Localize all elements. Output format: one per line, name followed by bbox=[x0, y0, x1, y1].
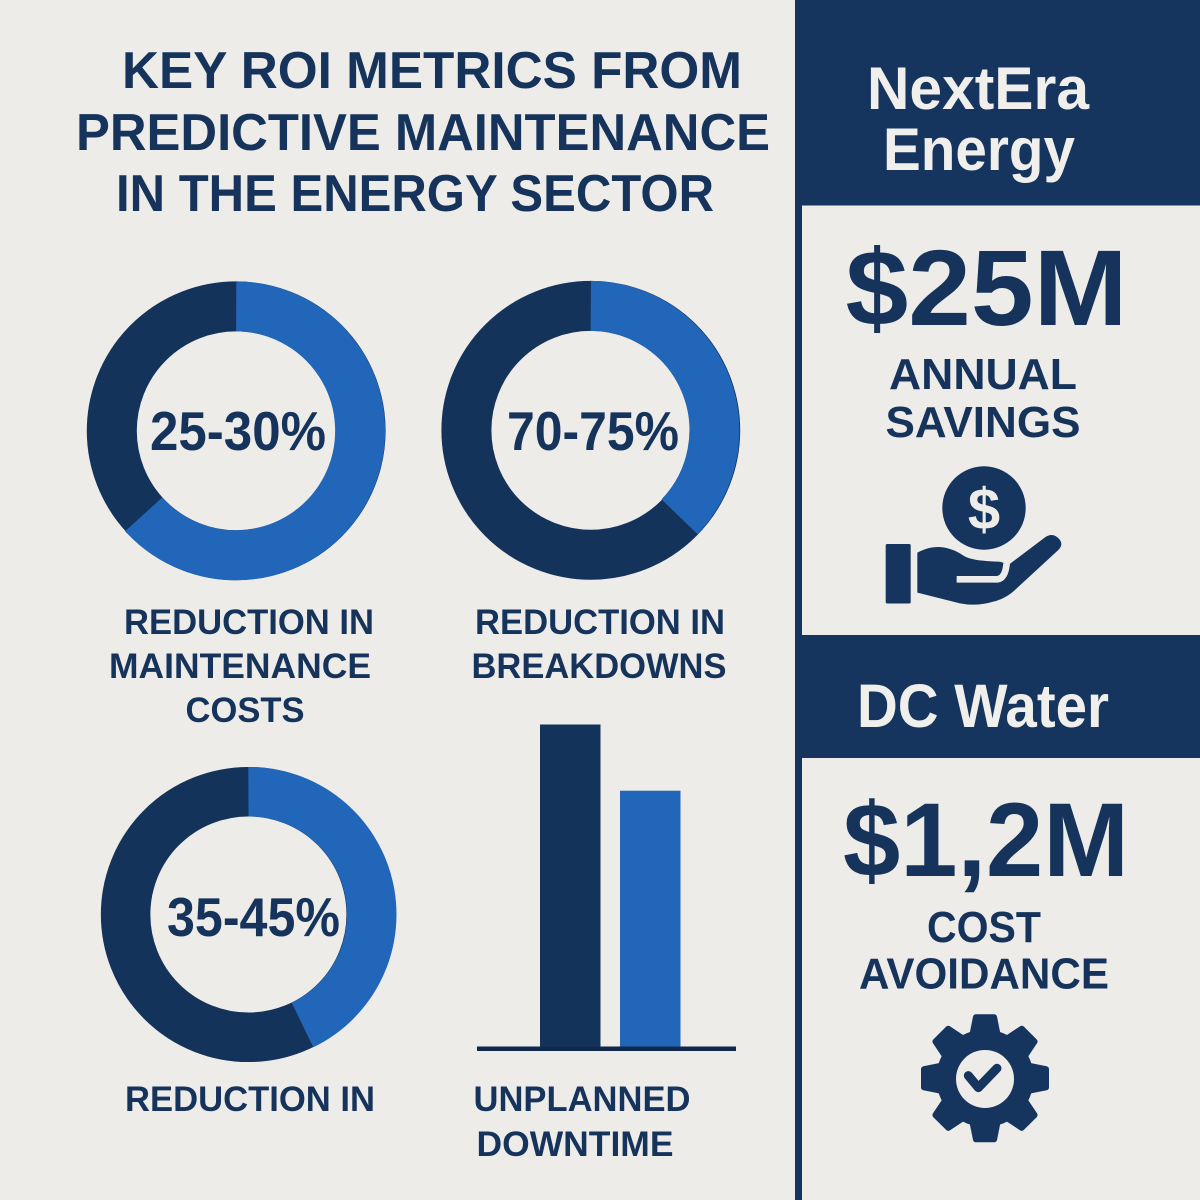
donut chart: downtime 35-45%: 35-45% bbox=[167, 886, 340, 948]
label: reduction in maintenance costs: MAINTENANCE bbox=[109, 647, 371, 686]
label: reduction in breakdowns bbox=[472, 603, 726, 686]
icon: hand holding coin bbox=[886, 466, 1061, 605]
title: KEY ROI METRICS FROM bbox=[122, 42, 742, 100]
donut chart: maintenance costs 25-30% bbox=[112, 306, 361, 555]
donut chart: breakdowns 70-75% bbox=[466, 306, 715, 555]
header band: NextEra Energy: NextEra bbox=[867, 55, 1090, 122]
label: reduction in maintenance costs: REDUCTION IN bbox=[124, 603, 374, 642]
header band: NextEra Energy bbox=[795, 0, 1200, 206]
header band: NextEra Energy: Energy bbox=[883, 116, 1076, 183]
donut chart: breakdowns 70-75%: 70-75% bbox=[507, 400, 679, 462]
label: reduction in maintenance costs bbox=[109, 603, 374, 730]
label: reduction in: REDUCTION IN bbox=[125, 1080, 375, 1119]
label: reduction in breakdowns: BREAKDOWNS bbox=[472, 647, 726, 686]
donut chart: maintenance costs 25-30%: 25-30% bbox=[150, 400, 326, 462]
label: unplanned downtime bbox=[474, 1080, 690, 1164]
donut chart: downtime 35-45% bbox=[126, 792, 372, 1037]
label: cost avoidance: AVOIDANCE bbox=[859, 950, 1109, 998]
icon: gear with check bbox=[921, 1014, 1049, 1142]
icon: hand holding coin: $ bbox=[968, 477, 1000, 542]
label: annual savings: SAVINGS bbox=[886, 398, 1080, 447]
label: unplanned downtime: UNPLANNED bbox=[474, 1080, 690, 1119]
header band: DC Water bbox=[795, 635, 1200, 758]
title: IN THE ENERGY SECTOR bbox=[116, 165, 714, 223]
label: unplanned downtime: DOWNTIME bbox=[476, 1125, 674, 1164]
metric: $1,2M: $1,2M bbox=[843, 782, 1129, 899]
right column divider bbox=[795, 0, 802, 1200]
header band: DC Water: DC Water bbox=[857, 672, 1109, 740]
label: annual savings: ANNUAL bbox=[889, 350, 1077, 399]
title: PREDICTIVE MAINTENANCE bbox=[76, 104, 770, 162]
title bbox=[76, 42, 770, 223]
label: cost avoidance: COST bbox=[927, 903, 1041, 952]
label: reduction in maintenance costs: COSTS bbox=[186, 691, 304, 730]
metric: $25M: $25M bbox=[846, 227, 1128, 348]
bar chart: unplanned downtime bbox=[477, 724, 736, 1051]
label: reduction in breakdowns: REDUCTION IN bbox=[475, 603, 725, 642]
label: annual savings bbox=[886, 350, 1080, 447]
label: cost avoidance bbox=[859, 903, 1109, 998]
